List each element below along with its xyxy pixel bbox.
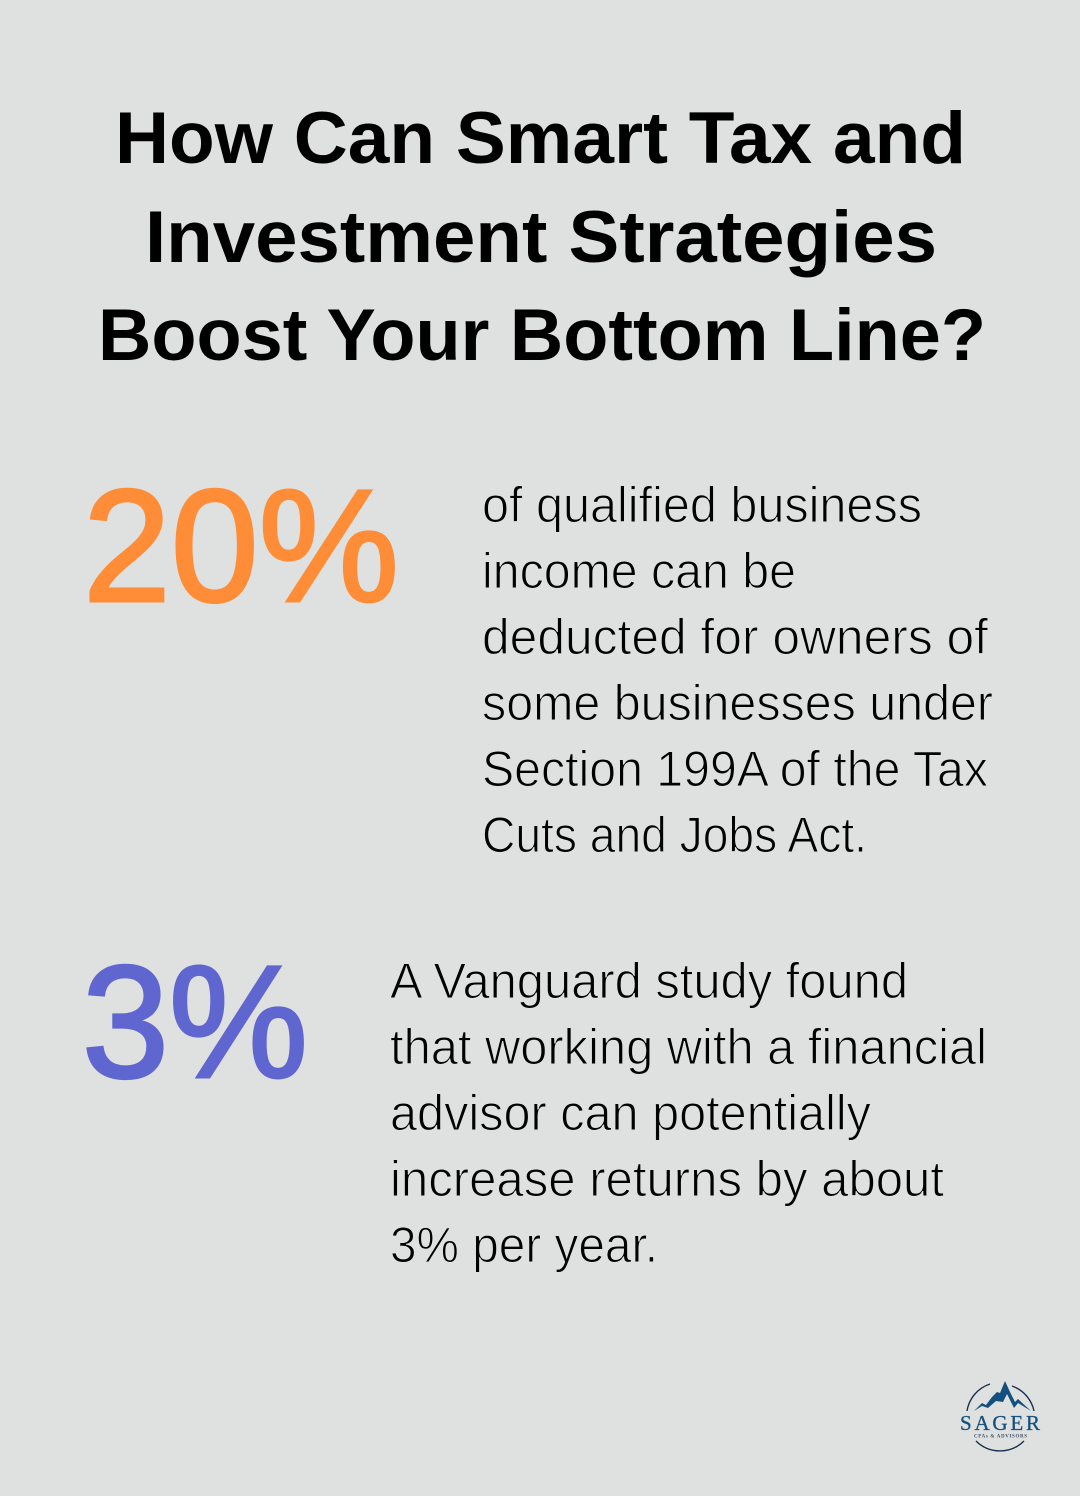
stat text: qualified business income deduction: income can be [482,543,796,599]
title: Investment Strategies [145,197,937,278]
stat text: qualified business income deduction: Cuts and Jobs Act. [482,807,867,863]
stat text: qualified business income deduction: of qualified business [482,477,922,533]
stat text: Vanguard advisor study: A Vanguard study found [390,953,908,1009]
stat text: Vanguard advisor study: that working with a financial [390,1019,987,1075]
logo: Sager CPAs & Advisors: CPAs & ADVISORS [974,1434,1027,1440]
stat text: qualified business income deduction: some businesses under [482,675,993,731]
stat text: qualified business income deduction [482,477,993,863]
logo: Sager CPAs & Advisors [960,1381,1040,1451]
title [98,98,986,376]
stat text: Vanguard advisor study: advisor can potentially [390,1085,871,1141]
stat text: Vanguard advisor study: 3% per year. [390,1217,658,1273]
title: Boost Your Bottom Line? [98,295,986,376]
stat text: Vanguard advisor study: increase returns by about [390,1151,944,1207]
title: How Can Smart Tax and [115,98,966,179]
stat text: Vanguard advisor study [390,953,987,1273]
stat: 20%: 20% [83,456,399,635]
stat text: qualified business income deduction: deducted for owners of [482,609,988,665]
stat: 3%: 3% [82,932,308,1111]
stat text: qualified business income deduction: Section 199A of the Tax [482,741,988,797]
logo: Sager CPAs & Advisors: SAGER [960,1411,1040,1435]
